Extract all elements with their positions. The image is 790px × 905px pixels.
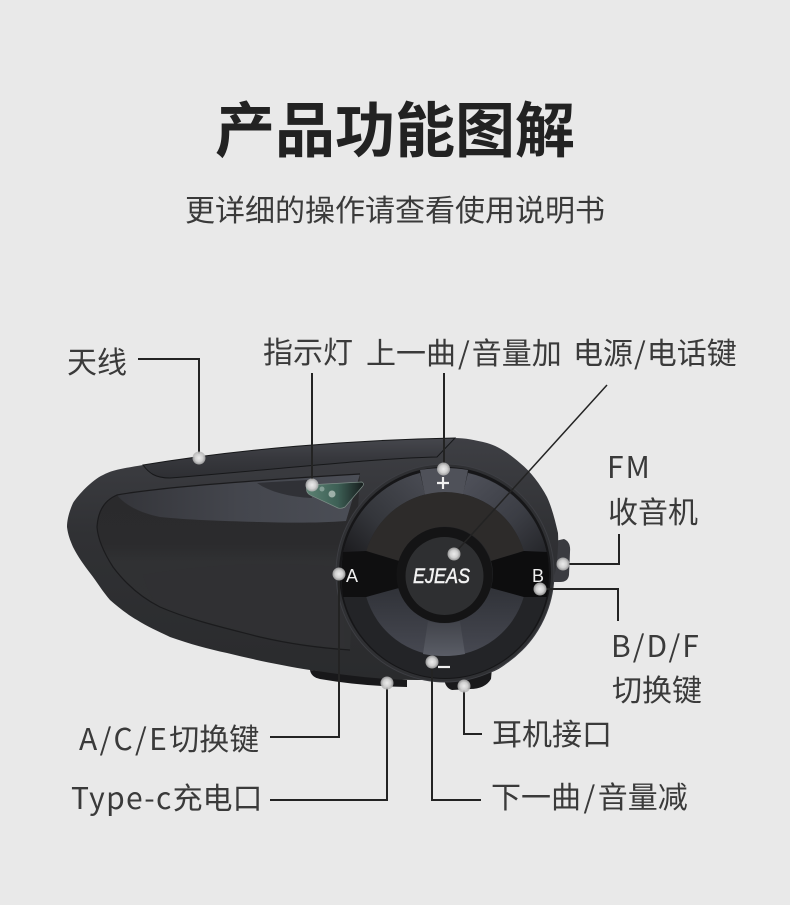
device: headset intercom unit: [67, 438, 570, 690]
button letters: B: [532, 566, 544, 586]
label: previous track / volume up: 上一曲/音量加: [366, 329, 562, 373]
device indicator light window: [306, 482, 364, 508]
label: next track / volume down: 下一曲/音量减: [491, 773, 688, 817]
device antenna strip: [143, 438, 455, 478]
title: 产品功能图解: [215, 83, 575, 170]
label: Type-c charging port: Type-c充电口: [71, 774, 263, 818]
device feet and ports: [310, 539, 570, 690]
button letters: [346, 477, 544, 667]
hub: [396, 527, 492, 623]
label: power / phone key: 电源/电话键: [573, 329, 737, 373]
minus button segment: [423, 621, 465, 656]
upper outer ring segments: [343, 473, 425, 552]
label: A/C/E switch key: A/C/E切换键: [79, 715, 259, 759]
subtitle: 更详细的操作请查看使用说明书: [185, 186, 605, 230]
button letters: A: [346, 566, 358, 586]
label: indicator light: 指示灯: [263, 328, 353, 372]
right B button segment: [491, 551, 549, 597]
label: earphone jack: 耳机接口: [492, 710, 612, 754]
left A button segment: [342, 551, 399, 597]
button dial: [336, 464, 554, 682]
plus button segment: [420, 468, 468, 495]
label: FM radio: 收音机: [608, 488, 698, 532]
logo: EJEAS: [413, 565, 470, 588]
middle ring upper: [366, 492, 524, 561]
middle ring lower: [366, 587, 524, 656]
callout lines: [138, 359, 619, 800]
label: FM radio: FM: [607, 443, 652, 487]
device inset side panel: [97, 474, 360, 650]
label: B/D/F switch key: 切换键: [612, 666, 702, 710]
label: antenna: 天线: [67, 338, 127, 382]
label: B/D/F switch key: B/D/F: [611, 622, 701, 666]
label: FM radio: [607, 443, 698, 532]
label: B/D/F switch key: [611, 622, 702, 710]
device body shell: [67, 438, 558, 680]
callout marker dots: [192, 452, 570, 692]
